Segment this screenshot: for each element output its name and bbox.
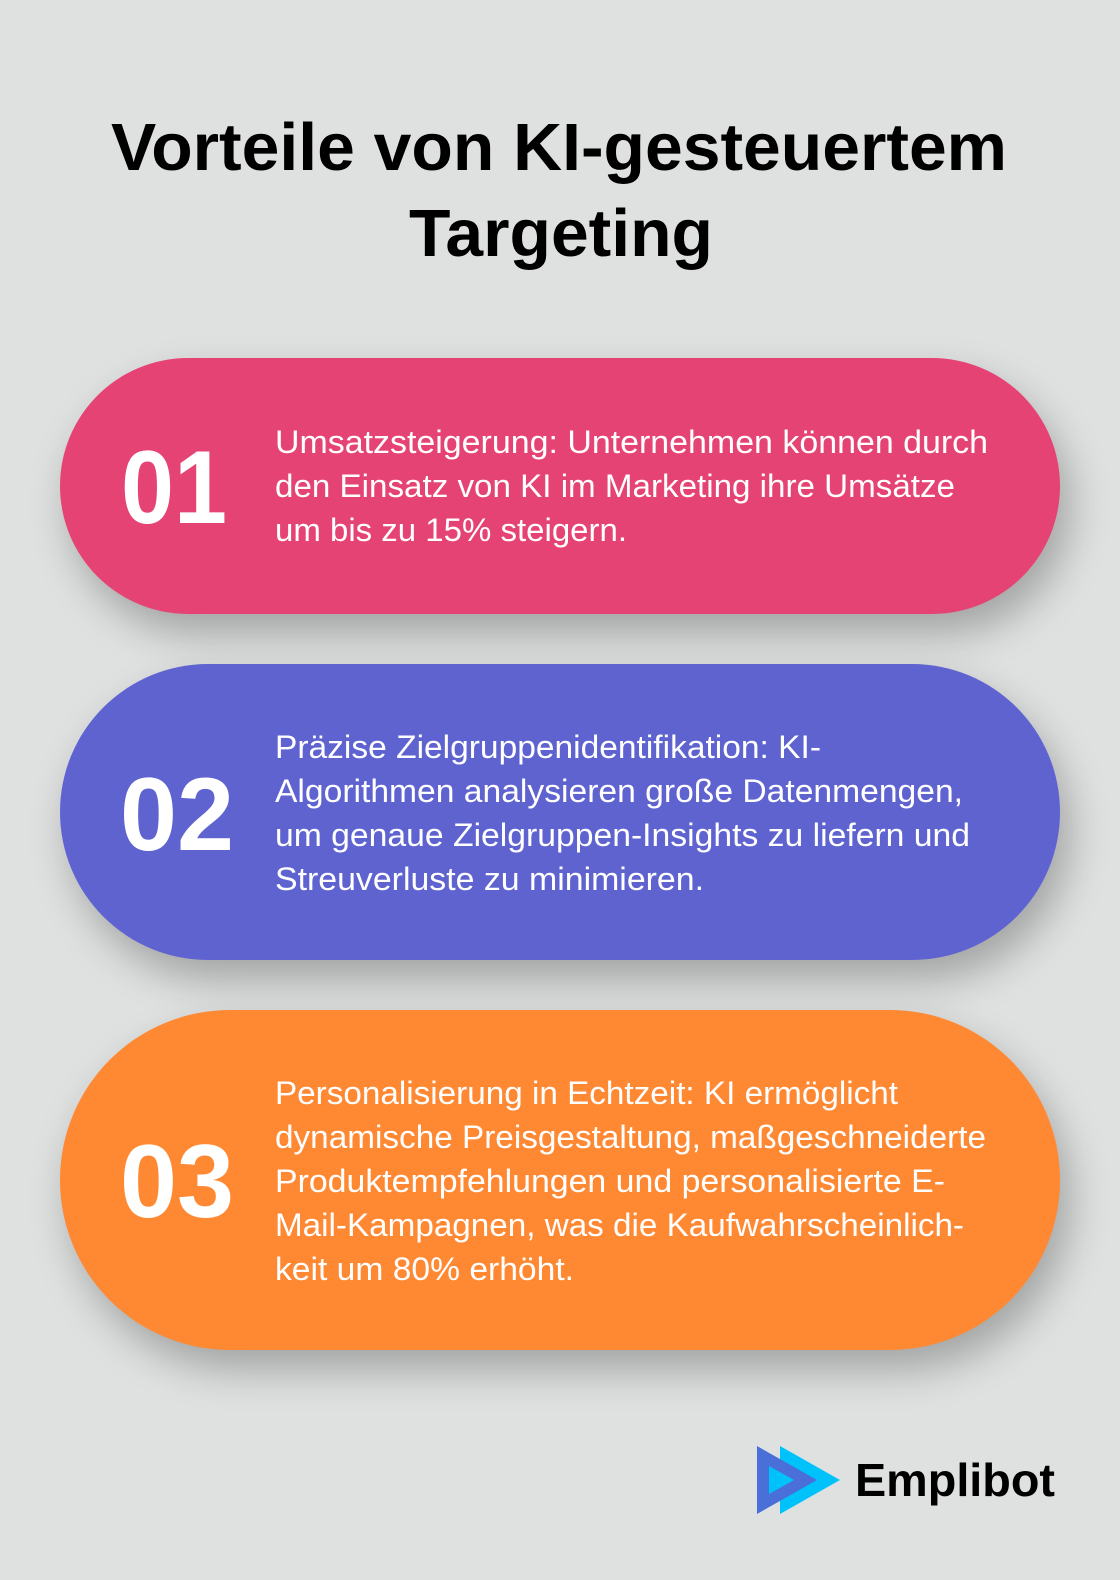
number 03: 03 [120, 1124, 234, 1240]
text block 03: dynamische Preisgestaltung, maßgeschneiderte [275, 1119, 986, 1155]
title [111, 110, 1007, 271]
text block 01: um bis zu 15% steigern. [275, 512, 627, 548]
title: Targeting [409, 196, 713, 271]
text block 03: Produktempfehlungen und personalisierte E- [275, 1163, 945, 1199]
text block 01: Umsatzsteigerung: Unternehmen können durch [275, 424, 988, 460]
text block 01: den Einsatz von KI im Marketing ihre Umsätze [275, 468, 955, 504]
logo: Emplibot [757, 1446, 1055, 1514]
panel: 02 Zielgruppenidentifikation [60, 664, 1060, 960]
text block 03: Mail-Kampagnen, was die Kaufwahrscheinlich- [275, 1207, 964, 1243]
number 01: 01 [121, 430, 227, 546]
text block 03: keit um 80% erhöht. [275, 1251, 574, 1287]
wordmark: Emplibot [855, 1454, 1055, 1506]
panel: 01 Umsatzsteigerung [60, 358, 1060, 614]
number 02: 02 [120, 757, 234, 873]
text block 02: um genaue Zielgruppen-Insights zu liefern und [275, 817, 970, 853]
text block 01 [275, 424, 988, 548]
icon: play triangles [757, 1446, 840, 1514]
panel: 03 Personalisierung [60, 1010, 1060, 1350]
text block 02: Präzise Zielgruppenidentifikation: KI- [275, 729, 821, 765]
text block 02 [275, 729, 970, 897]
text block 02: Algorithmen analysieren große Datenmengen, [275, 773, 963, 809]
text block 02: Streuverluste zu minimieren. [275, 861, 704, 897]
text block 03 [275, 1075, 986, 1287]
text block 03: Personalisierung in Echtzeit: KI ermöglicht [275, 1075, 898, 1111]
title: Vorteile von KI-gesteuertem [111, 110, 1007, 185]
